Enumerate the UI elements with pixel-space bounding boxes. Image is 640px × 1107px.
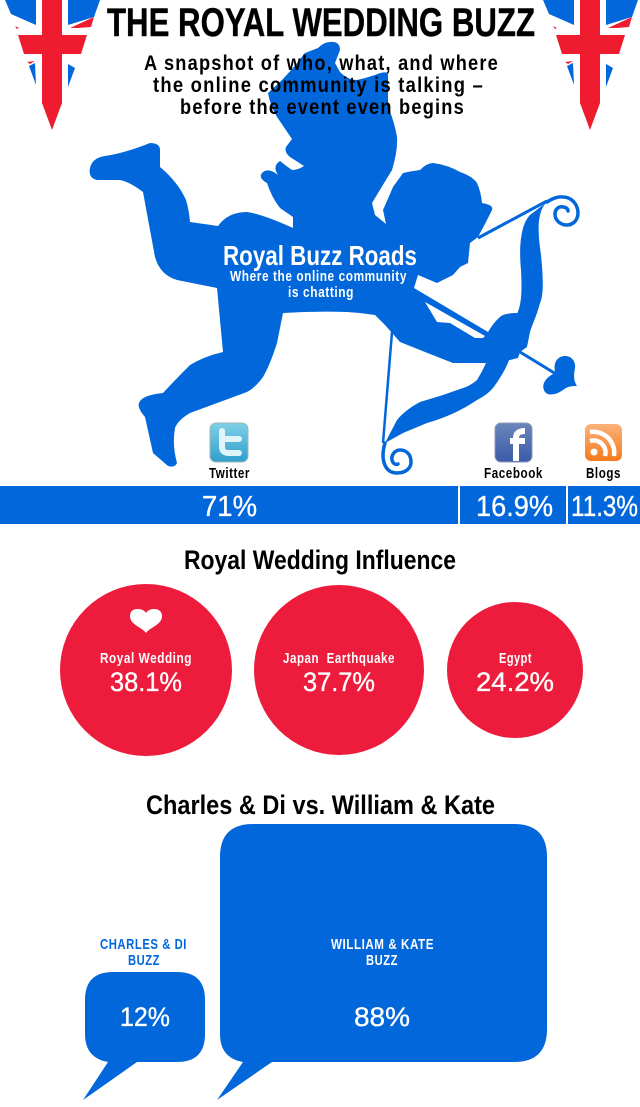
subtitle [144,52,499,119]
segment: twitter: 71% [202,491,257,523]
speech bubble: william and kate: 88% [354,1002,410,1032]
heading: charles vs william: Charles & Di vs. William & Kate [146,790,495,820]
icon: twitter [210,423,248,462]
label: blogs: Blogs [586,466,621,482]
circle: japan earthquake: Japan Earthquake [283,651,395,667]
subtitle: before the event even begins [180,96,465,119]
circle: egypt [447,602,583,738]
speech bubble: charles and di: 12% [120,1002,170,1032]
circle: egypt: 24.2% [476,667,554,697]
icon: facebook [495,423,532,462]
heading: Royal Buzz Roads: Where the online community [230,269,407,285]
heading: Royal Buzz Roads: Royal Buzz Roads [223,240,417,271]
bar: buzz share [0,486,640,524]
segment: twitter [0,486,458,524]
subtitle: A snapshot of who, what, and where [144,52,499,75]
speech bubble: william and kate: WILLIAM & KATE [331,937,434,953]
cupid silhouette [90,42,578,473]
circle: royal wedding: Royal Wedding [100,651,192,667]
subtitle: the online community is talking – [153,74,484,97]
speech bubble: william and kate: BUZZ [366,953,398,969]
icon: heart [130,609,162,633]
circle: royal wedding [60,584,232,756]
heading: Royal Buzz Roads: is chatting [288,285,354,301]
speech bubble: william and kate [217,824,547,1100]
title: THE ROYAL WEDDING BUZZ [107,1,535,45]
flag pennant: right [543,0,638,130]
speech bubble: charles and di [83,972,205,1100]
circle: egypt: Egypt [499,651,532,667]
circle: royal wedding: 38.1% [110,667,182,697]
segment: facebook: 16.9% [476,491,553,523]
icon: blogs rss [585,424,622,461]
flag pennant: left [5,0,100,130]
label: charles and di buzz [100,937,187,969]
heading: influence: Royal Wedding Influence [184,545,456,575]
heading: Royal Buzz Roads [223,240,417,301]
label: twitter: Twitter [209,466,250,482]
circle: japan earthquake [254,585,424,755]
circle: japan earthquake: 37.7% [303,667,375,697]
label: charles and di buzz: CHARLES & DI [100,937,187,953]
segment: facebook [460,486,566,524]
label: facebook: Facebook [484,466,543,482]
label: charles and di buzz: BUZZ [128,953,160,969]
